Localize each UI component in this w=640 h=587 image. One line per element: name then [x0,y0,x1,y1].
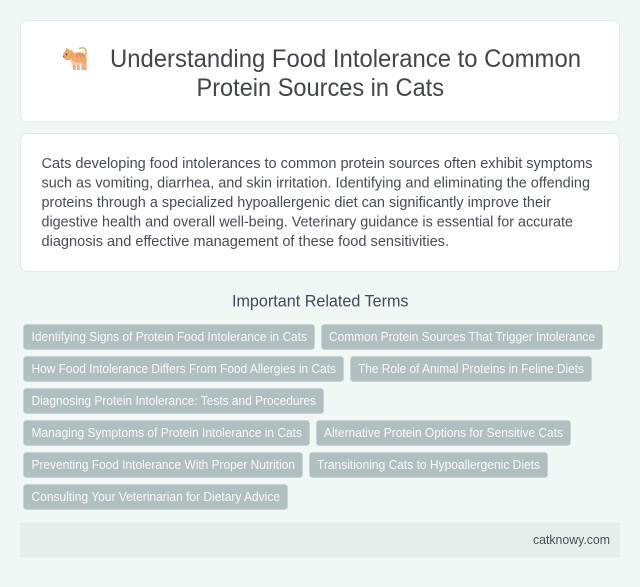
text block: description paragraph: digestive health and overall well-being. Veterinary guidance is essential for accurate [42,214,573,230]
text block: description paragraph: diagnosis and effective management of these food sensitivities. [42,234,449,250]
panel: title card [20,20,620,122]
heading: related terms: Important Related Terms [232,292,408,310]
tag: diagnosing: Diagnosing Protein Intolerance: Tests and Procedures [32,394,316,408]
footer [20,523,620,557]
tag: managing symptoms [24,420,310,446]
tag: transitioning: Transitioning Cats to Hypoallergenic Diets [317,458,540,472]
tag: common protein sources [322,324,602,350]
tag: intolerance vs allergies: How Food Intolerance Differs From Food Allergies in Cats [32,362,336,376]
tag: consulting veterinarian: Consulting Your Veterinarian for Dietary Advice [32,490,280,504]
icon: orange cat [63,48,87,70]
panel: related term tags [24,324,602,510]
tag: identifying signs: Identifying Signs of Protein Food Intolerance in Cats [32,330,307,344]
tag: animal proteins [350,356,592,382]
tag: intolerance vs allergies [24,356,344,382]
tag: common protein sources: Common Protein Sources That Trigger Intolerance [329,330,595,344]
tag: consulting veterinarian [24,484,288,510]
panel: description [20,134,620,272]
footer: site name: catknowy.com [533,532,610,547]
tag: animal proteins: The Role of Animal Proteins in Feline Diets [358,362,584,376]
tag: identifying signs [24,324,314,350]
title [110,45,581,102]
title: Protein Sources in Cats [196,74,444,102]
tag: preventing intolerance: Preventing Food Intolerance With Proper Nutrition [32,458,295,472]
text block: description paragraph: such as vomiting, diarrhea, and skin irritation. Identifying and eliminating the offending [42,176,590,192]
tag: transitioning [310,452,548,478]
tag: diagnosing [24,388,324,414]
text block: description paragraph: proteins through a specialized hypoallergenic diet can significantly improve their [42,195,551,211]
title: Understanding Food Intolerance to Common [110,45,581,73]
tag: managing symptoms: Managing Symptoms of Protein Intolerance in Cats [32,426,302,440]
tag: preventing intolerance [24,452,302,478]
tag: alternative proteins [316,420,570,446]
text block: description paragraph [42,156,592,250]
tag: alternative proteins: Alternative Protein Options for Sensitive Cats [324,426,563,440]
text block: description paragraph: Cats developing food intolerances to common protein sources often exhibit symptoms [42,156,592,172]
